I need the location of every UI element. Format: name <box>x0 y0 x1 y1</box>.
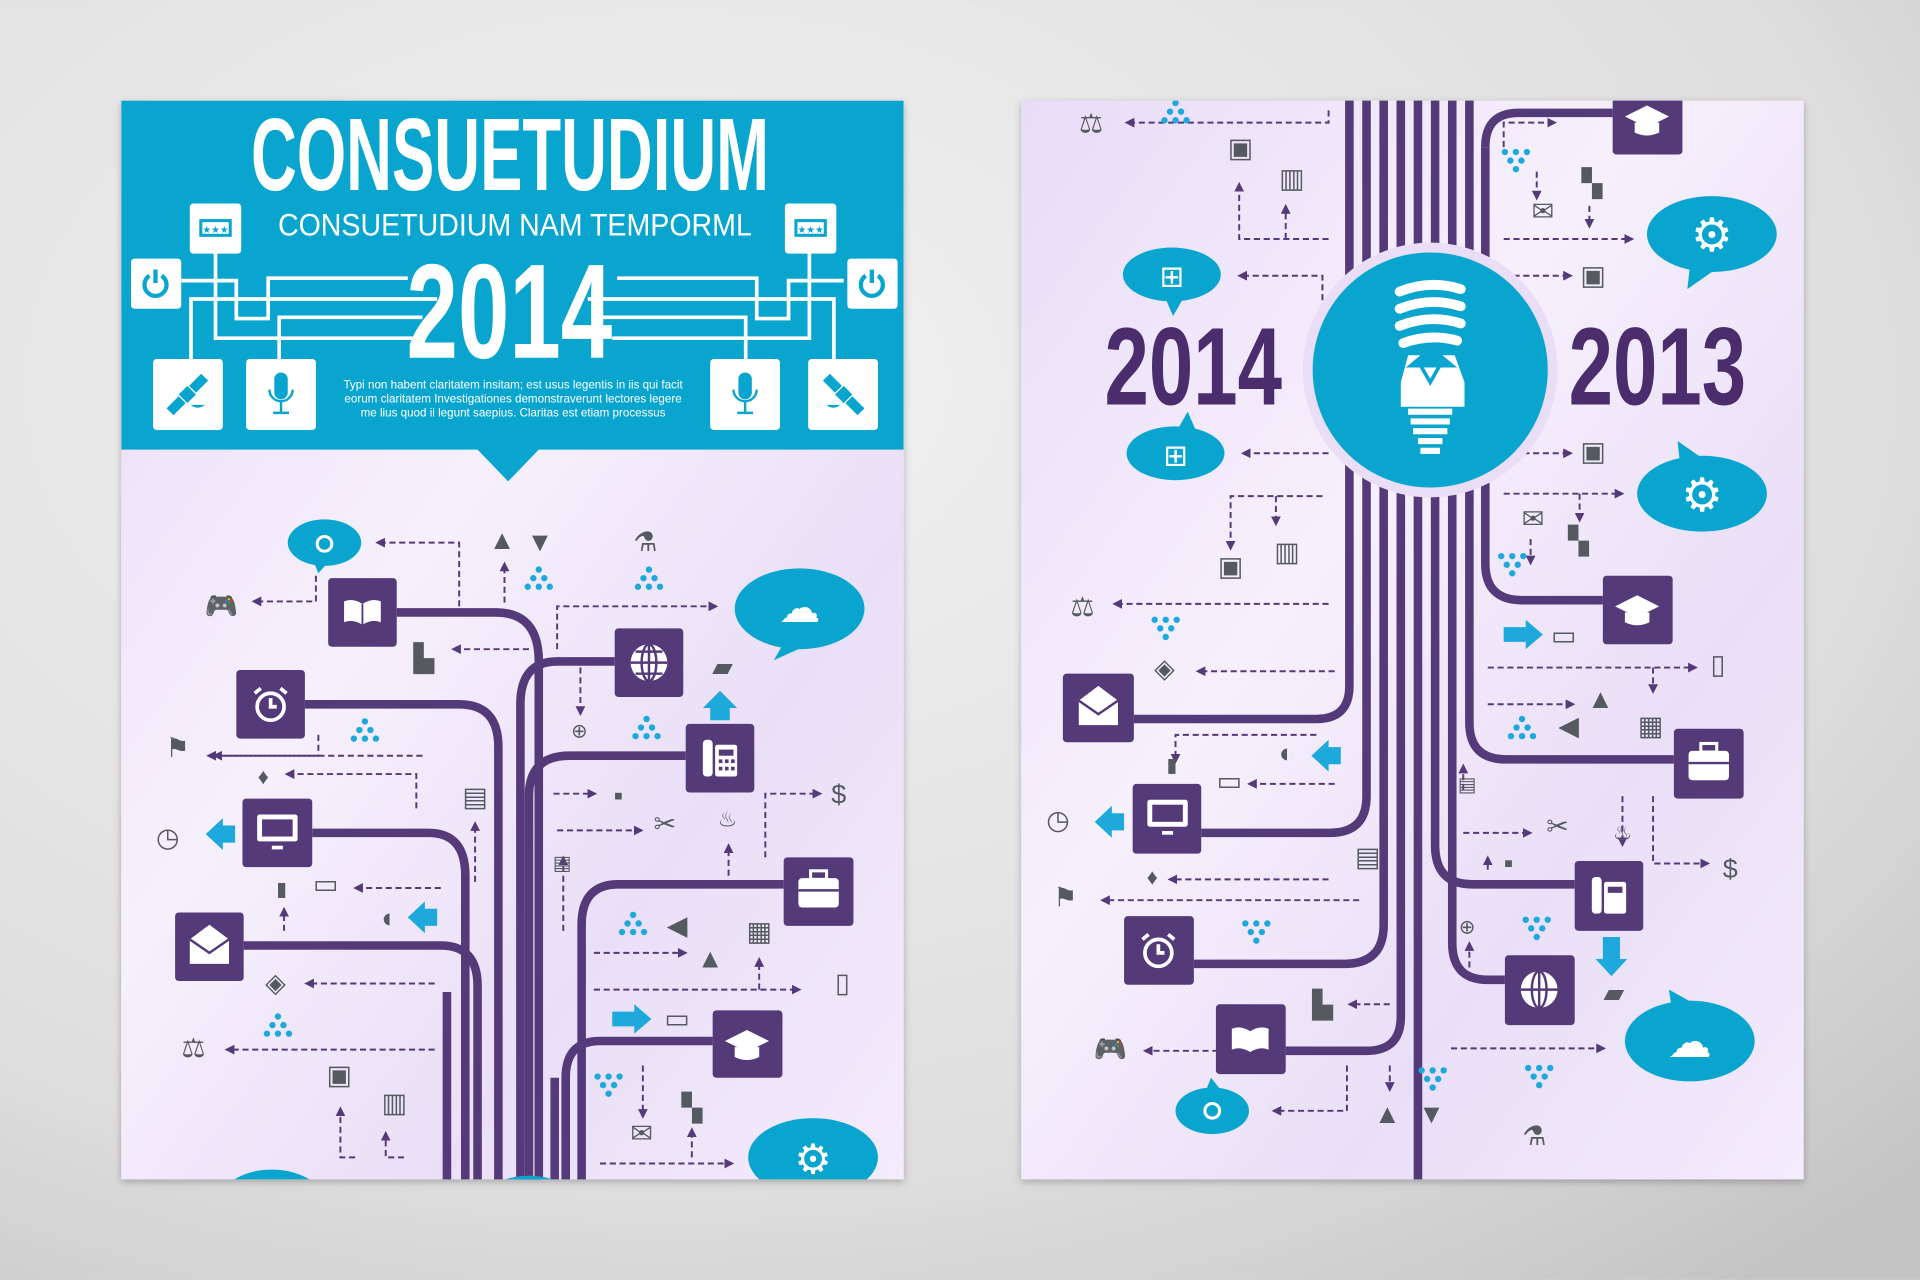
paragraph: eorum claritatem Investigationes demonstraverunt lectores legere <box>344 392 682 405</box>
grey small icons (right): ▰ <box>1604 978 1625 1008</box>
grey small icons (left): ▥ <box>382 1088 407 1118</box>
purple icon boxes (left) <box>175 578 853 1078</box>
grey small icons (left): ▭ <box>664 1004 690 1034</box>
grey small icons (left): ◀ <box>667 910 688 940</box>
grey small icons (right): $ <box>1723 854 1738 884</box>
grey small icons (left): ▙ <box>412 642 435 675</box>
grey small icons (left): ♦ <box>258 764 269 789</box>
blue arrows (left) <box>206 691 737 1034</box>
grey small icons (left): ⚖ <box>181 1033 206 1063</box>
grey small icons (right): ⚖ <box>1079 108 1103 138</box>
grey small icons (right): ⚑ <box>1053 882 1077 912</box>
grey small icons (left): ◷ <box>156 822 180 852</box>
paragraph: Typi non habent claritatem insitam; est usus legentis in iis qui facit <box>343 378 683 391</box>
grey small icons (right): 🎮 <box>1094 1034 1127 1064</box>
grey small icons (left): ◈ <box>265 968 286 998</box>
paragraph <box>343 378 683 420</box>
grey small icons (left): $ <box>831 779 846 809</box>
dot clusters (left) <box>264 566 663 1097</box>
grey small icons (left): ▮ <box>276 878 287 900</box>
grey small icons (right): ♨ <box>1613 820 1632 845</box>
grey small icons (right): ▣ <box>1228 133 1253 163</box>
grey small icons (left): ▲ <box>489 525 515 555</box>
blue bubbles (right): ⊞ <box>1160 261 1184 294</box>
paragraph: me lius quod ii legunt saepius. Claritas est etiam processus <box>361 407 666 420</box>
header icon boxes: ★★★ <box>797 225 824 236</box>
grey small icons (right): ⚖ <box>1070 592 1095 622</box>
grey small icons (left) <box>156 525 850 1149</box>
grey small icons (right): ▯ <box>1711 650 1725 680</box>
blue bubbles (right) <box>1123 196 1777 1134</box>
grey small icons (left): ⚗ <box>633 527 657 557</box>
left page <box>121 97 904 1243</box>
grey small icons (right): ◐ <box>1279 738 1295 768</box>
grey small icons (right): ▭ <box>1217 766 1242 796</box>
grey small icons (right): ▤ <box>1458 774 1476 796</box>
blue bubbles (right): ⊞ <box>1163 440 1188 473</box>
purple icon boxes (right) <box>1063 86 1744 1074</box>
grey small icons (left): ▪ <box>614 781 623 811</box>
grey small icons (right): ▚ <box>1580 166 1603 199</box>
grey small icons (left): ◐ <box>381 903 398 933</box>
blue bubbles (right): ⚙ <box>1681 469 1723 521</box>
grey small icons (left): ▦ <box>746 917 772 947</box>
blue arrows (right) <box>1095 620 1627 976</box>
grey small icons (right): ▦ <box>1638 711 1663 741</box>
grey small icons (right): ✉ <box>1522 504 1544 534</box>
blue bubbles (left): ⚙ <box>794 1135 832 1182</box>
purple trunk lines (right) <box>1134 86 1674 1188</box>
grey small icons (right): ▪ <box>1504 848 1513 878</box>
grey small icons (left): ▤ <box>553 853 571 875</box>
grey small icons (left): ▣ <box>326 1060 352 1090</box>
grey small icons (right): ◷ <box>1046 805 1070 835</box>
grey small icons (right): ▙ <box>1311 988 1334 1021</box>
grey small icons (right): ▼ <box>1418 1099 1445 1129</box>
grey small icons (right): ✉ <box>1532 197 1554 227</box>
grey small icons (right): ✂ <box>1546 811 1569 841</box>
central bulb circle <box>1308 248 1553 492</box>
header icon boxes <box>131 203 898 430</box>
grey small icons (right): ▣ <box>1580 260 1606 290</box>
dot clusters (right) <box>1152 100 1553 1091</box>
header band <box>121 97 904 481</box>
grey small icons (right): ▭ <box>1551 620 1576 650</box>
grey small icons (right): ▲ <box>1587 684 1614 714</box>
right page: 2013 <box>1569 305 1746 428</box>
year 2014: 2014 <box>407 236 612 387</box>
grey small icons (right): ▥ <box>1279 164 1305 194</box>
purple trunk lines <box>244 612 784 1188</box>
grey small icons (right): ◈ <box>1154 653 1175 683</box>
grey small icons (right): ⚗ <box>1522 1121 1546 1151</box>
dashed connectors (right) <box>1102 110 1708 1111</box>
right page <box>1021 86 1804 1188</box>
grey small icons (left): ✉ <box>630 1119 653 1149</box>
grey small icons (right): ♦ <box>1147 864 1158 889</box>
grey small icons (left): 🎮 <box>205 591 238 621</box>
grey small icons (right): ▥ <box>1274 537 1300 567</box>
grey small icons (right) <box>1046 108 1738 1151</box>
grey small icons (left): ▰ <box>712 652 733 682</box>
header icon boxes: ★★★ <box>202 225 229 236</box>
year labels (right): 2014 <box>1104 305 1282 428</box>
grey small icons (right): ▣ <box>1218 552 1243 582</box>
grey small icons (left): ▯ <box>835 968 850 998</box>
grey small icons (left): ▚ <box>680 1091 703 1124</box>
grey small icons (right): ▤ <box>1355 842 1380 872</box>
blue bubbles (right): ⚙ <box>1691 209 1733 261</box>
grey small icons (right): ▮ <box>1166 755 1177 777</box>
grey small icons (right): ▲ <box>1374 1099 1401 1129</box>
dashed connectors <box>208 543 820 1163</box>
grey small icons (left): ✂ <box>654 809 676 839</box>
grey small icons (left): ▤ <box>462 782 488 812</box>
grey small icons (right): ▚ <box>1567 524 1590 557</box>
blue bubbles (left): ☁ <box>779 584 820 631</box>
blue bubbles (left) <box>234 519 878 1180</box>
title: CONSUETUDIUM <box>251 97 769 212</box>
header connector lines <box>181 254 844 360</box>
grey small icons (left): ⚑ <box>165 733 190 763</box>
grey small icons (left): ▲ <box>697 944 724 974</box>
grey small icons (left): ▭ <box>313 869 338 899</box>
grey small icons (left): ▼ <box>527 527 553 557</box>
grey small icons (right): ⊕ <box>1459 916 1475 938</box>
grey small icons (left): ⊕ <box>571 720 587 742</box>
blue bubbles (right): ☁ <box>1668 1018 1712 1067</box>
grey small icons (right): ▣ <box>1580 437 1606 467</box>
subtitle: CONSUETUDIUM NAM TEMPORML <box>278 206 752 242</box>
grey small icons (right): ◀ <box>1558 711 1579 741</box>
grey small icons (left): ♨ <box>717 807 737 832</box>
